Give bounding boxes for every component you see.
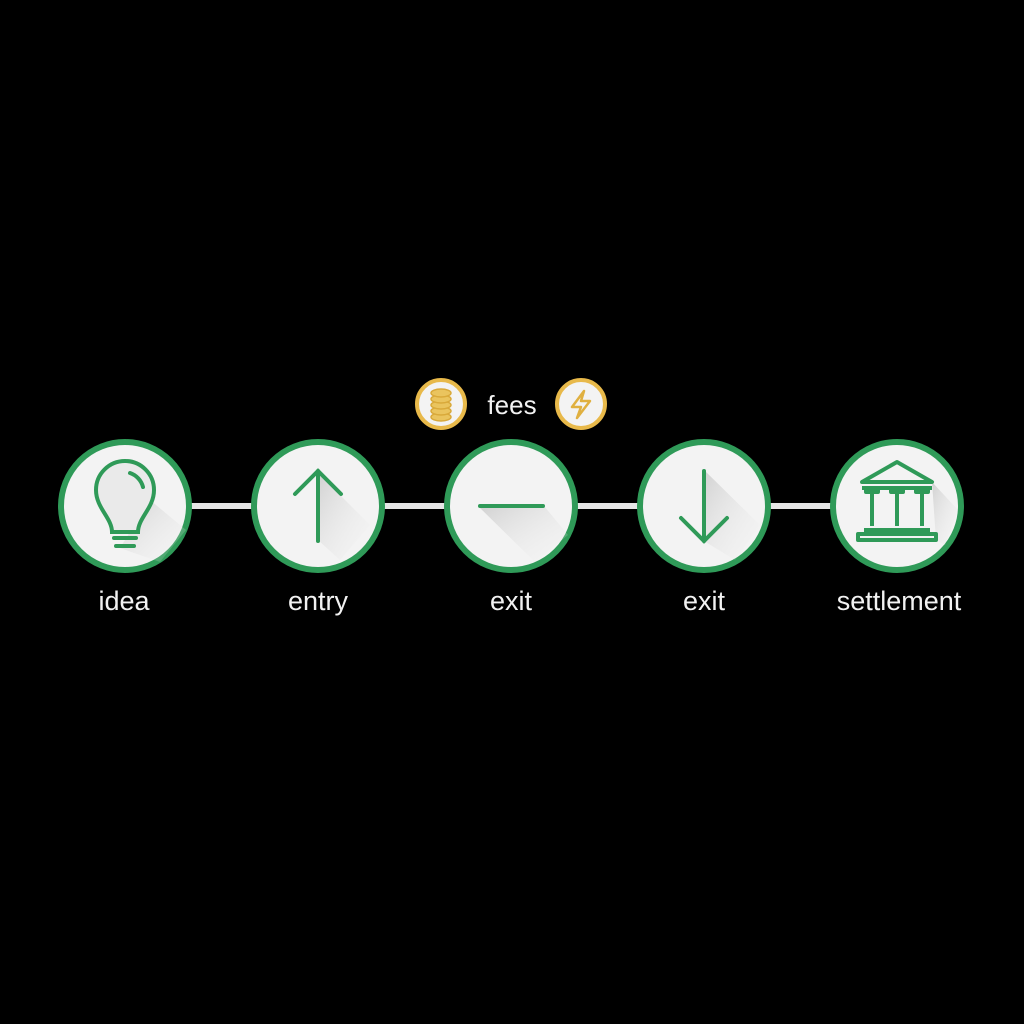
label: settlement: settlement xyxy=(837,586,962,616)
step: exit (flat) xyxy=(447,442,575,570)
step: exit (down) xyxy=(640,442,768,570)
label: idea: idea xyxy=(98,586,151,616)
icon: light bulb xyxy=(96,461,154,546)
step: entry xyxy=(254,442,382,570)
icon: coins xyxy=(417,380,465,428)
icon: lightning xyxy=(557,380,605,428)
fees callout xyxy=(417,380,605,428)
connector line xyxy=(124,503,898,509)
step: idea xyxy=(61,442,189,570)
icon: dash xyxy=(480,504,543,508)
step: settlement xyxy=(833,442,961,570)
label: exit 2: exit xyxy=(683,586,725,616)
icon: up arrow xyxy=(295,471,341,541)
icon: down arrow xyxy=(681,471,727,541)
fees text: fees xyxy=(487,390,537,420)
label: entry: entry xyxy=(288,586,349,616)
label: exit: exit xyxy=(490,586,532,616)
icon: bank building xyxy=(858,462,936,540)
